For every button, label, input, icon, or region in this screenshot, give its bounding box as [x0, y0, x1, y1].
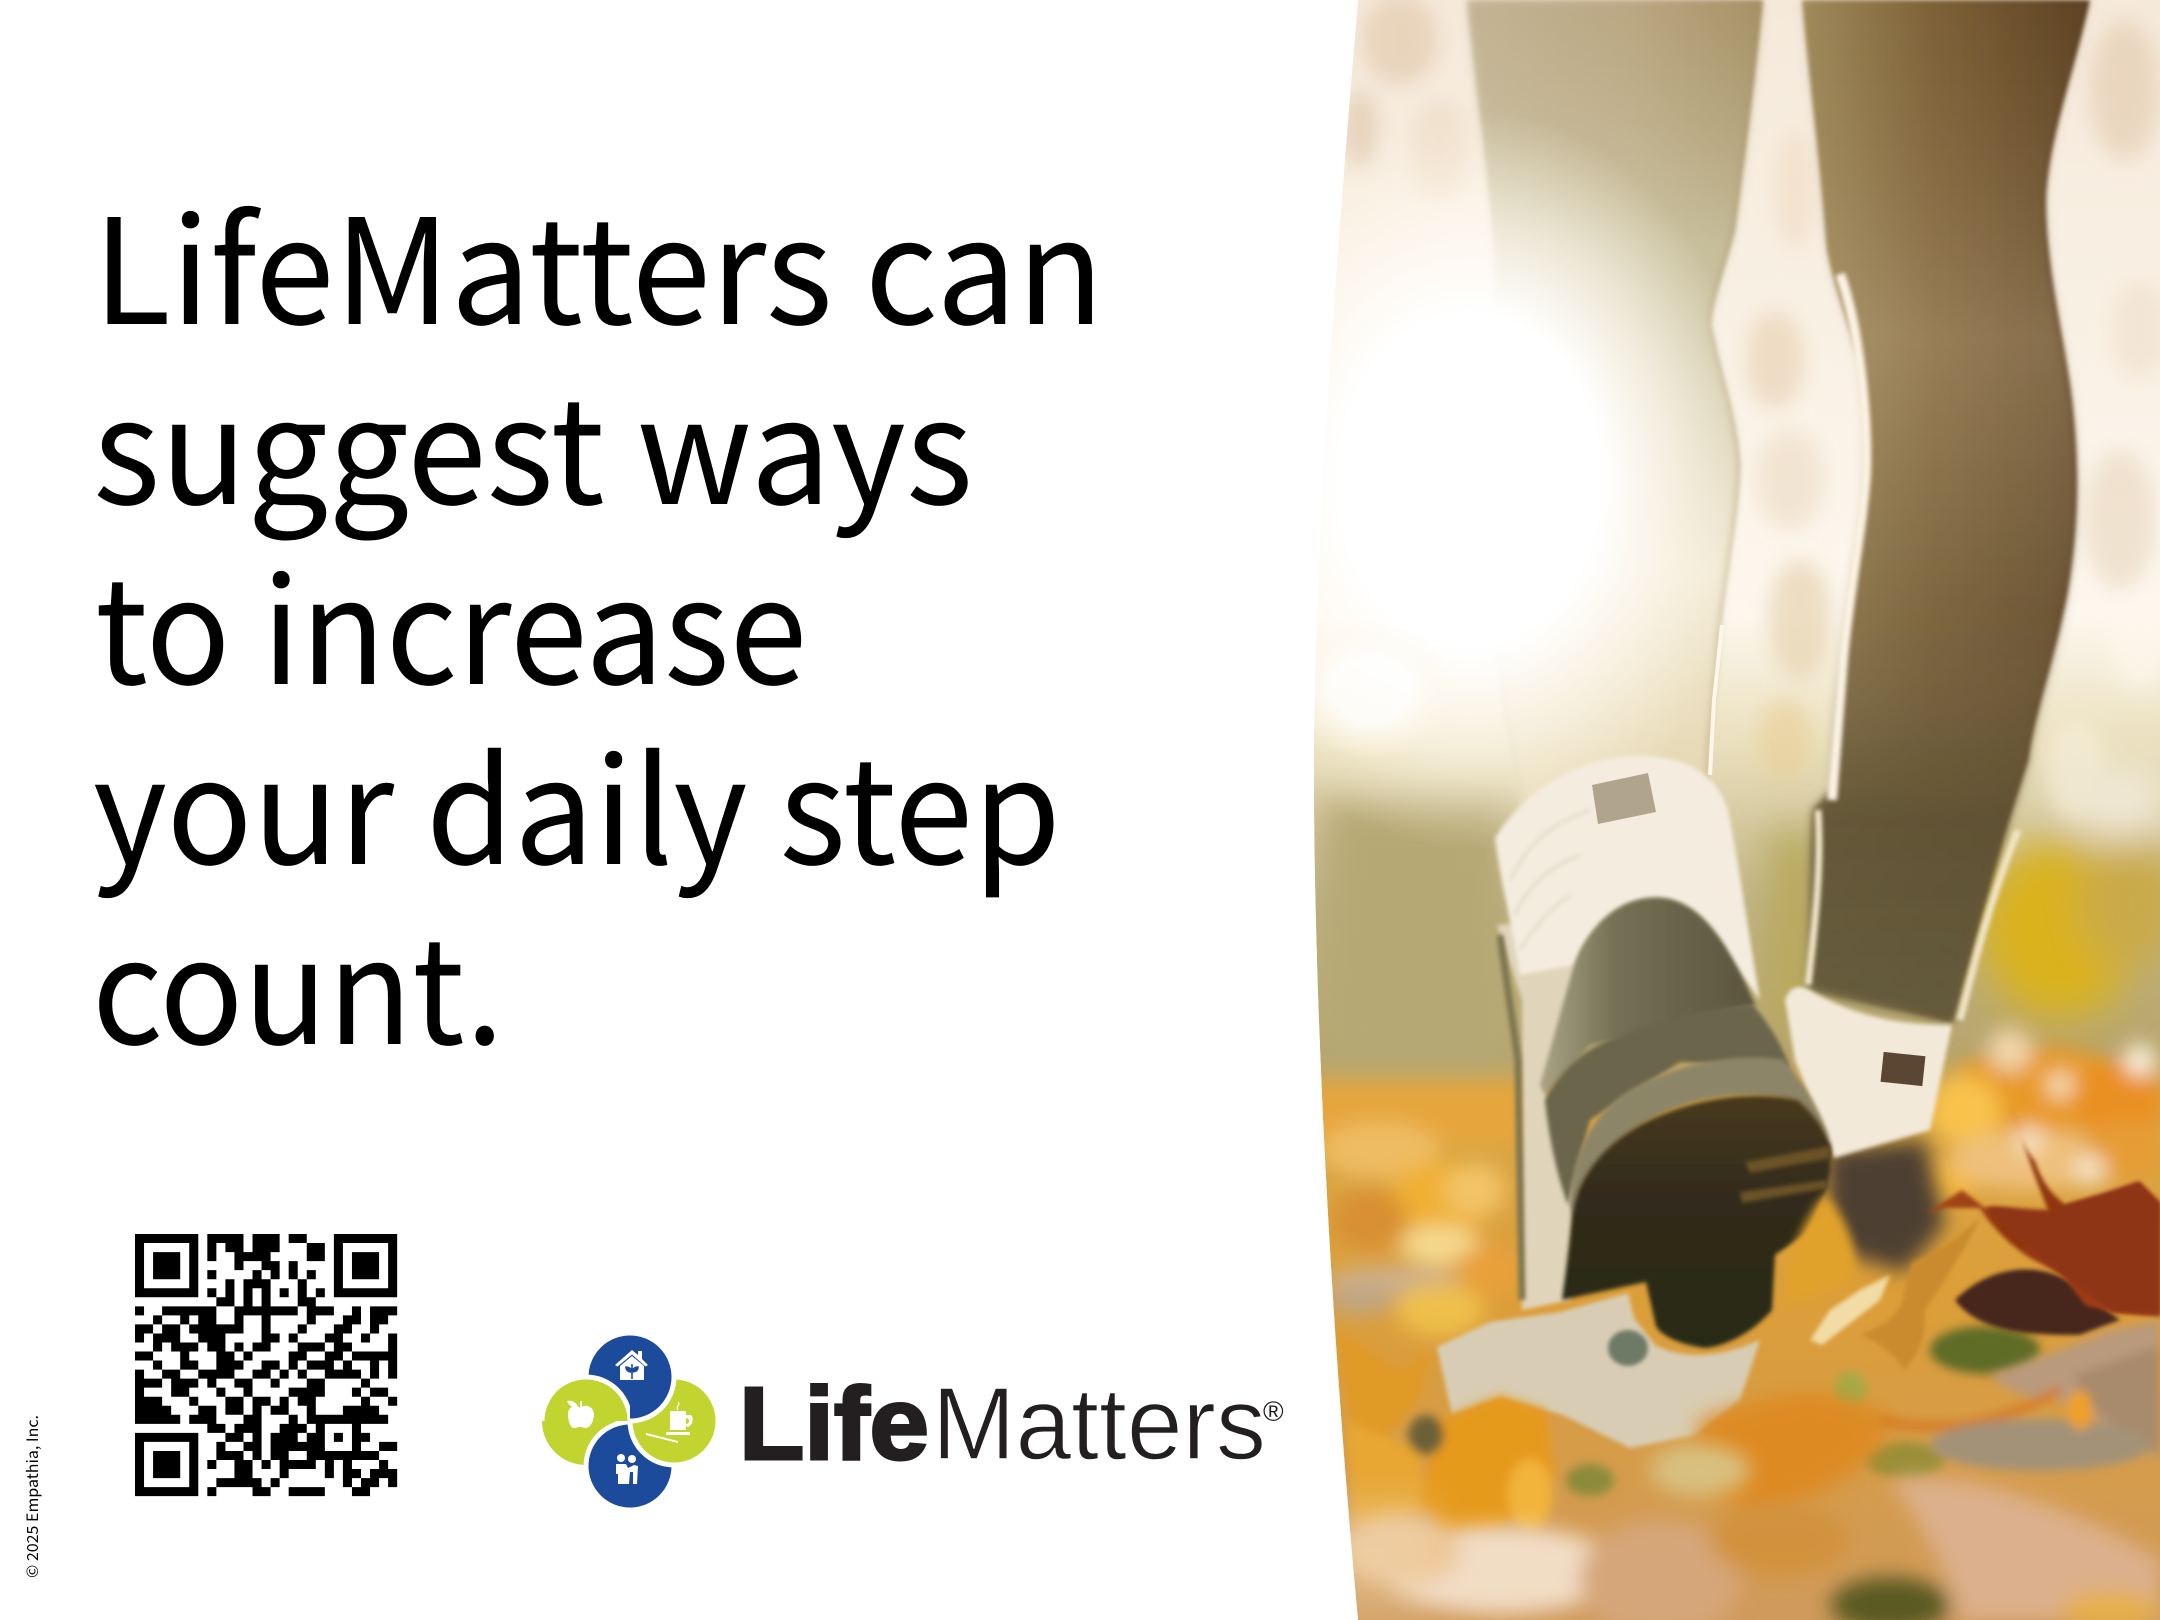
LifeMatters logo [542, 1333, 1284, 1510]
wordmark light part: Matters [932, 1366, 1266, 1481]
copyright notice: © 2025 Empathia, Inc. [21, 1415, 43, 1578]
pale leaf under the boot [1437, 1293, 1760, 1448]
photo backdrop [1300, 0, 2160, 1620]
near leg light shading [1467, 0, 1763, 815]
icon: apple [567, 1401, 594, 1428]
far sock rim light [1808, 810, 2018, 1020]
far boot cuff [1785, 987, 1952, 1158]
near boot quilted cuff [1495, 756, 1760, 1000]
white curved photo edge highlight [1306, 0, 1358, 1620]
left green petal overlap [542, 1377, 630, 1465]
icon: two people [616, 1454, 638, 1484]
dark curled leaf [1955, 1269, 2120, 1335]
pale crumpled leaves [1810, 1275, 1890, 1345]
near boot tread [1562, 1096, 1831, 1348]
near boot sole rim [1570, 1057, 1830, 1215]
near leg rim light [1710, 625, 1722, 775]
background: olive haze and yellow foliage [1320, 760, 2160, 1070]
bokeh: bright background foliage [1342, 0, 2160, 820]
icon: house with plant [615, 1350, 648, 1380]
golden curled leaf [1862, 1218, 1980, 1370]
blurred orange foreground leaf [1698, 1393, 1890, 1515]
sun glow softening [1310, 1500, 1430, 1620]
dark gap in pale leaf [1608, 1330, 1648, 1366]
cuff quilting lines [1510, 810, 1590, 950]
photo: walker's legs and boots in autumn leaves [1314, 0, 2160, 1620]
tread ridges [1740, 1146, 1830, 1203]
QR code [135, 1234, 397, 1496]
registered mark: ® [1263, 1396, 1284, 1427]
heading line 4: your daily step [93, 696, 1061, 907]
top blue petal [586, 1333, 674, 1421]
heading line 5: count. [92, 876, 504, 1087]
near boot left edge [1500, 935, 1522, 1300]
bottom blue petal [586, 1422, 674, 1510]
heading [92, 156, 1104, 1087]
ground leaves: blurred mid-ground [1310, 1028, 2160, 1336]
right green petal [630, 1377, 718, 1465]
logo emblem: interlocking circles [542, 1333, 718, 1510]
far leg light shading [1802, 0, 2090, 1022]
icon: coffee mug [646, 1402, 693, 1443]
left green petal [542, 1377, 630, 1465]
near boot cuff patch [1592, 773, 1656, 824]
red maple leaf [1925, 1068, 2160, 1316]
left foreground leaves [1335, 1330, 1614, 1535]
far boot patch [1881, 1052, 1925, 1086]
near leg [1467, 0, 1763, 815]
heading line 2: suggest ways [93, 336, 973, 547]
sun glare lower-left [1314, 656, 1418, 748]
near boot leather [1540, 898, 1755, 1095]
blurred foreground: bottom leaves [1340, 1444, 2160, 1620]
far boot sole [1826, 1140, 1945, 1272]
golden leaf beside the boot [1785, 1195, 1856, 1300]
wordmark bold part: Life [739, 1366, 929, 1481]
far leg rim light [1832, 274, 1866, 800]
heading line 3: to increase [95, 516, 807, 727]
near boot ribbed band [1545, 1004, 1790, 1205]
tan leaves at right [1880, 1320, 2160, 1471]
far leg [1802, 0, 2090, 1022]
red leaf body [1985, 1182, 2160, 1316]
sun glare [1314, 131, 1739, 836]
near boot outer side [1497, 920, 1580, 1310]
right-side grass [1834, 1326, 2040, 1478]
heading line 1: LifeMatters can [93, 156, 1104, 367]
